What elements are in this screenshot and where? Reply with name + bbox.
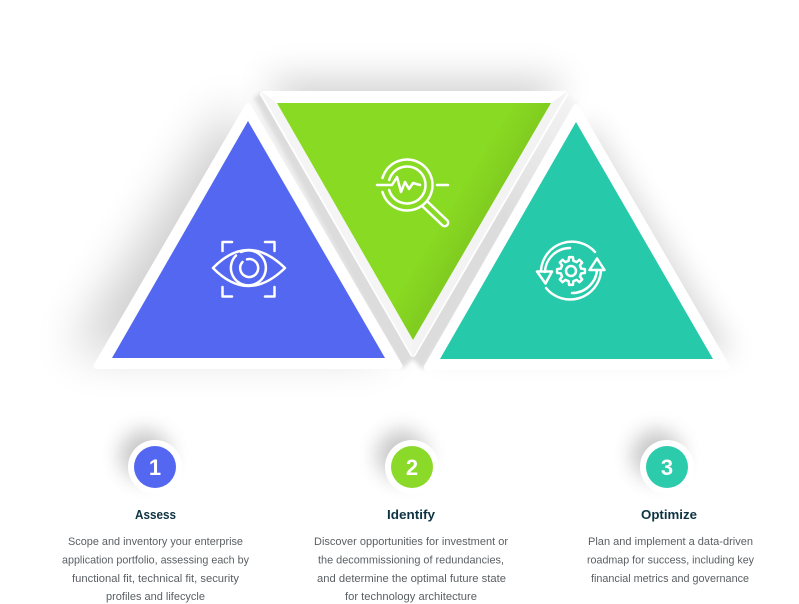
text block: assess description: profiles and lifecycle xyxy=(106,591,205,603)
panel: blue triangle xyxy=(96,106,400,366)
text block: identify description: for technology architecture xyxy=(345,591,477,603)
heading: assess: Assess xyxy=(135,508,176,522)
badge: number 2 xyxy=(377,430,439,494)
panel: step 2 identify xyxy=(314,430,508,603)
icon: eye scan xyxy=(213,242,285,296)
text block: assess description: functional fit, technical fit, security xyxy=(72,573,240,585)
badge: number 1 xyxy=(120,430,182,494)
text block: identify description xyxy=(314,536,508,603)
panel: triangle shadows xyxy=(70,78,735,370)
icon: magnifier with pulse xyxy=(377,160,448,226)
text block: optimize description xyxy=(587,536,754,585)
panel: step 1 assess xyxy=(62,430,249,603)
text block: identify description: Discover opportunities for investment or xyxy=(314,536,508,548)
badge: number 2: 2 xyxy=(406,455,418,480)
text block: optimize description: Plan and implement a data-driven xyxy=(588,536,753,548)
text block: assess description xyxy=(62,536,249,603)
text block: identify description: the decommissioning of redundancies, xyxy=(318,554,504,566)
text block: assess description: application portfolio, assessing each by xyxy=(62,554,249,566)
heading: identify: Identify xyxy=(387,508,435,522)
icon: gear with cycle arrows xyxy=(537,242,604,300)
text block: assess description: Scope and inventory your enterprise xyxy=(68,536,243,548)
panel: green triangle xyxy=(260,91,568,357)
text block: identify description: and determine the optimal future state xyxy=(317,573,506,585)
heading: optimize: Optimize xyxy=(641,508,697,522)
text block: optimize description: financial metrics and governance xyxy=(591,573,749,585)
panel: step 3 optimize xyxy=(587,430,754,585)
badge: number 3: 3 xyxy=(661,455,673,480)
panel: teal triangle xyxy=(427,107,727,367)
text block: optimize description: roadmap for success, including key xyxy=(587,554,754,566)
badge: number 3 xyxy=(632,430,694,494)
badge: number 1: 1 xyxy=(149,455,161,480)
